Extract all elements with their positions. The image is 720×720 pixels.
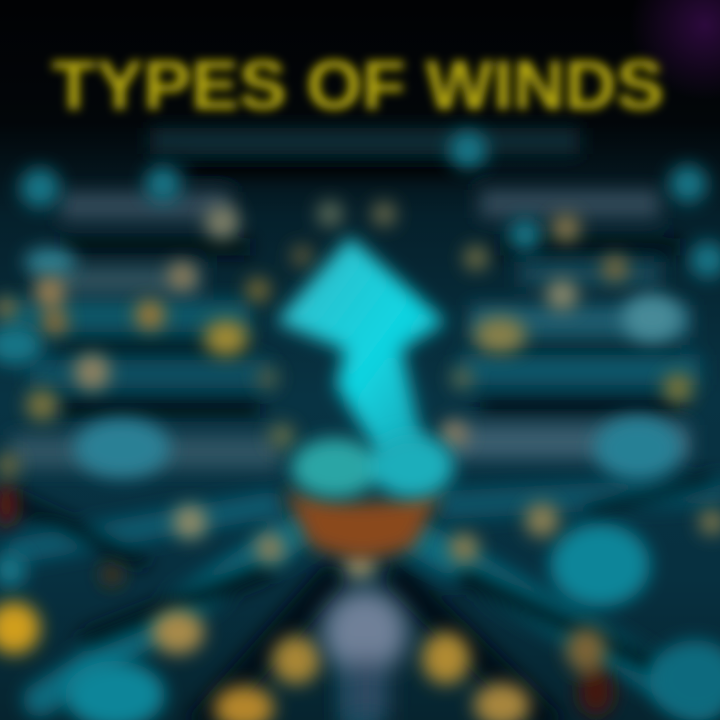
icon: lightning wind shape — [276, 236, 446, 465]
tan and amber nodes — [0, 201, 720, 720]
lower radiating rays — [10, 480, 715, 720]
central funnel icon — [276, 236, 454, 558]
wind streak bands — [0, 128, 700, 469]
icon: teal bowl — [291, 434, 454, 498]
title: TYPES OF WINDS — [52, 46, 664, 124]
lavender figure at bottom — [323, 590, 407, 720]
icon: brown pot — [285, 490, 440, 558]
